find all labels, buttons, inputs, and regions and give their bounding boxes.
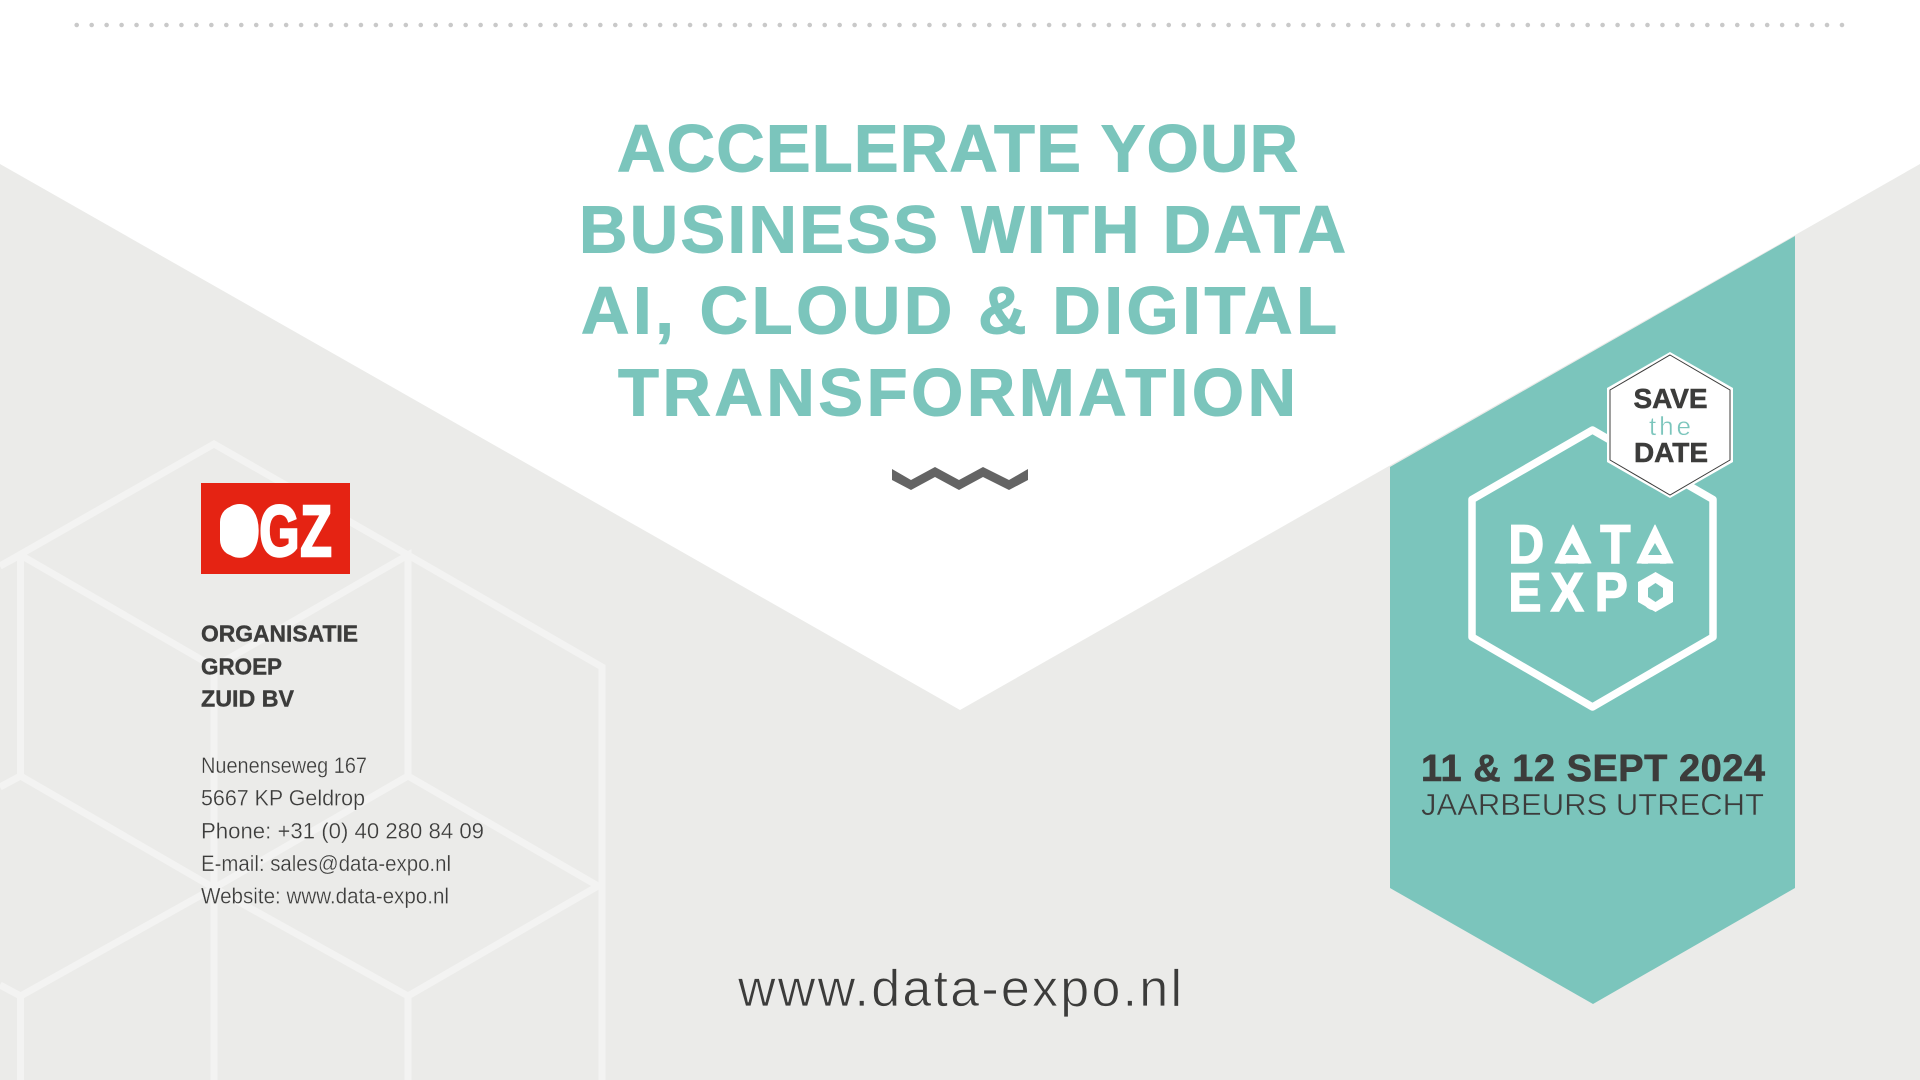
- panel: event banner: [1390, 236, 1795, 1004]
- title: BUSINESS WITH DATA: [579, 192, 1346, 268]
- dotted top rule: [77, 23, 1842, 27]
- hexagon outline: [1472, 430, 1713, 707]
- contact details: [201, 753, 484, 908]
- background: hexagon line pattern: [0, 444, 602, 1080]
- event date: 11 & 12 SEPT 2024: [1421, 748, 1765, 790]
- zigzag divider: [892, 467, 1028, 490]
- contact details: Nuenenseweg 167: [201, 753, 367, 778]
- title: TRANSFORMATION: [618, 356, 1296, 430]
- organisation name: GROEP: [201, 654, 282, 680]
- save the date badge: [1607, 352, 1733, 498]
- contact details: 5667 KP Geldrop: [201, 786, 365, 810]
- save the date badge: SAVE: [1634, 383, 1708, 414]
- title: [579, 112, 1346, 430]
- save the date badge: the: [1649, 411, 1691, 441]
- DATA EXPO logo: D A T A: [1508, 515, 1666, 576]
- contact details: Website: www.data-expo.nl: [201, 884, 449, 908]
- DATA EXPO logo: [1508, 515, 1673, 624]
- OGZ logo: [201, 483, 350, 574]
- organisation name: ZUID BV: [201, 686, 294, 712]
- DATA EXPO logo: O: [1642, 574, 1668, 617]
- organisation name: [201, 620, 358, 712]
- organisation name: ORGANISATIE: [201, 620, 358, 646]
- background: white chevron: [0, 0, 1920, 710]
- save the date badge: DATE: [1634, 437, 1708, 468]
- title: ACCELERATE YOUR: [617, 112, 1298, 186]
- event venue: JAARBEURS UTRECHT: [1421, 787, 1764, 822]
- contact details: Phone: +31 (0) 40 280 84 09: [201, 818, 484, 844]
- contact details: E-mail: sales@data-expo.nl: [201, 851, 451, 876]
- title: AI, CLOUD & DIGITAL: [581, 274, 1337, 348]
- website url: www.data-expo.nl: [737, 960, 1182, 1018]
- DATA EXPO logo: EXP: [1508, 563, 1628, 624]
- OGZ logo: OGZ: [220, 492, 332, 572]
